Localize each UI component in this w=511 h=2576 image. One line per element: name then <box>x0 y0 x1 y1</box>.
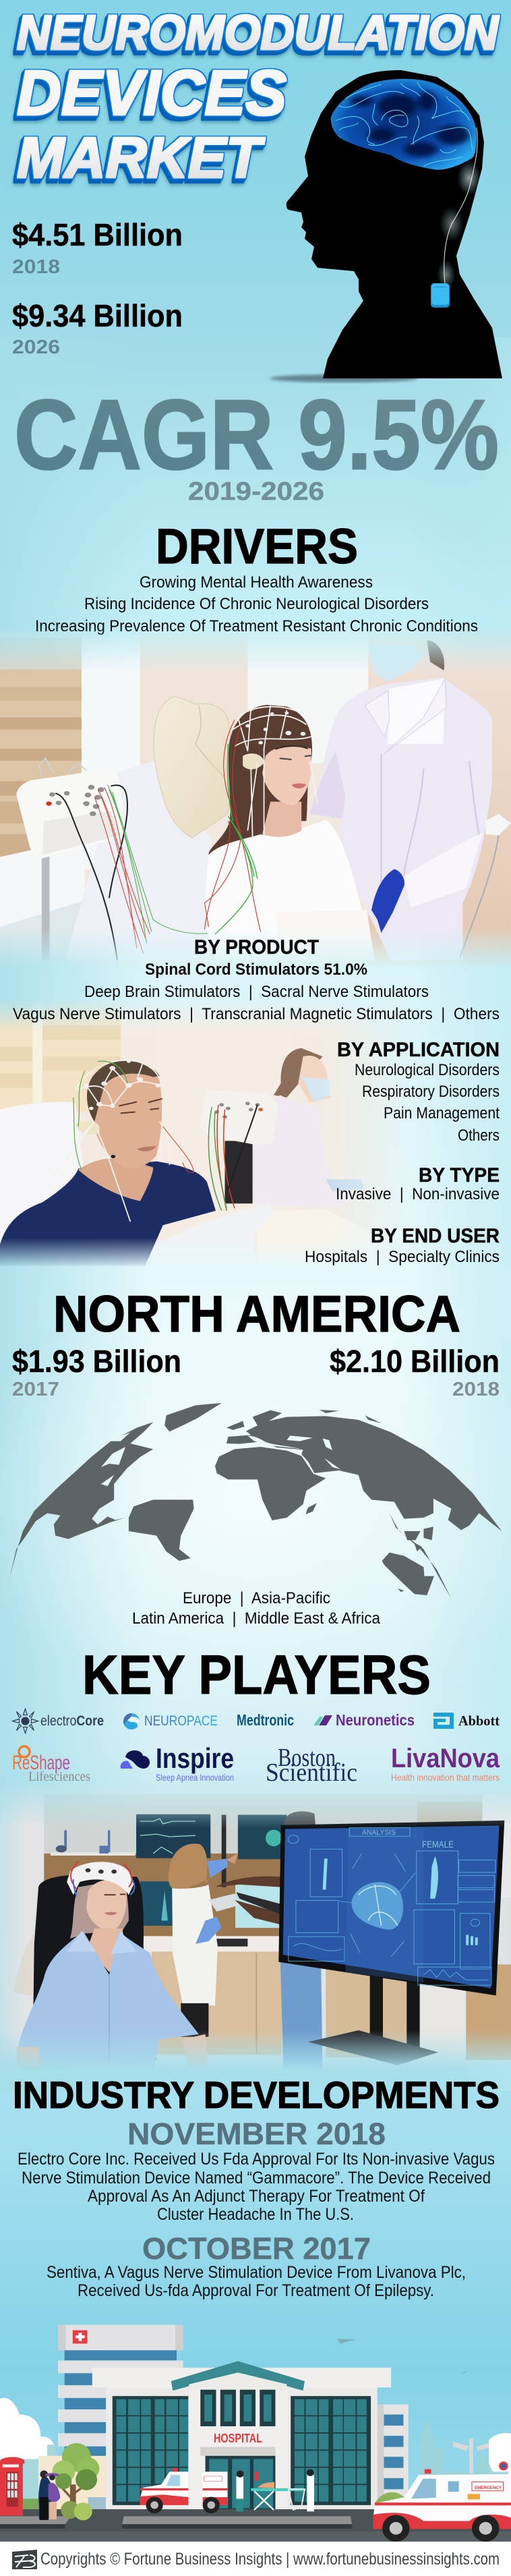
hospital sign: HOSPITAL <box>214 2432 262 2445</box>
drivers list <box>35 573 478 635</box>
logo: electroCore <box>12 1709 104 1734</box>
segment: by application: Others <box>458 1126 500 1145</box>
icon: Fortune Business Insights logo <box>12 2550 37 2569</box>
segment: by end user <box>305 1225 500 1266</box>
title line: neuromodulation: NEUROMODULATION <box>17 6 500 60</box>
other regions list: Latin America | Middle East & Africa <box>132 1609 381 1628</box>
logo: Inspire <box>121 1742 234 1783</box>
north america 2017 value: $1.93 Billion <box>12 1344 181 1379</box>
north america 2018 value: 2018 <box>452 1379 500 1400</box>
map: canada lakes and inlets <box>101 1432 130 1486</box>
segment: by product <box>13 936 500 1023</box>
phone box <box>0 2457 24 2515</box>
logo: Boston Scientific: Scientific <box>266 1758 357 1787</box>
lab cabinets <box>144 1936 511 2063</box>
icon: glowing brain <box>331 79 477 170</box>
heading: key players: KEY PLAYERS <box>82 1644 431 1706</box>
bush and street camera <box>375 2438 508 2504</box>
development: november 2018: Cluster Headache In The U.S. <box>157 2205 354 2224</box>
segment: by application: Pain Management <box>384 1104 500 1122</box>
tree and bushes <box>52 2443 99 2521</box>
monitoring device with leads <box>16 758 222 961</box>
segment: by type <box>336 1164 500 1203</box>
segment: by application <box>337 1039 500 1145</box>
ambulance label: EMERGENCY <box>475 2486 502 2490</box>
blue glove <box>371 869 404 933</box>
world map <box>10 1403 502 1599</box>
segment: by end user: Hospitals | Specialty Clinics <box>305 1248 500 1266</box>
map: madagascar <box>305 1503 317 1514</box>
tower block <box>38 2325 183 2510</box>
north america 2018 value: $2.10 Billion <box>330 1344 500 1379</box>
clouds and skyline <box>0 2339 511 2511</box>
illustration: hospital street scene <box>0 2325 511 2542</box>
logo: Inspire: Inspire <box>156 1742 234 1774</box>
ambulance in foreground <box>373 2469 511 2542</box>
development: october 2017 <box>47 2231 466 2300</box>
2018 market value: $4.51 Billion <box>12 217 183 252</box>
map: north america <box>10 1422 153 1577</box>
logo: NeuroPace: NEUROPACE <box>144 1713 218 1729</box>
nurse in lab coat <box>309 640 511 961</box>
map: australia <box>382 1553 434 1595</box>
development: november 2018 <box>18 2117 495 2224</box>
logo: Neuronetics: Neuronetics <box>336 1711 415 1729</box>
monitoring device with leads <box>200 1090 278 1211</box>
icon: stimulation wire <box>444 127 477 283</box>
shelf flasks <box>56 1830 110 1854</box>
north america 2017 value: 2017 <box>12 1379 59 1400</box>
road and pavements <box>0 2509 511 2542</box>
map: southeast asia islands <box>390 1513 462 1599</box>
background monitors <box>136 1814 287 1947</box>
drivers list: Rising Incidence Of Chronic Neurological Disorders <box>84 595 429 613</box>
icon: head silhouette with brain and implant <box>270 70 502 382</box>
reclining chair <box>65 761 212 961</box>
photo: neuro lab with seated woman and analysis screen <box>0 1784 511 2083</box>
heading: drivers: DRIVERS <box>156 519 358 574</box>
medical staff and stretcher <box>236 2469 314 2511</box>
other regions list <box>132 1589 381 1628</box>
patient chair <box>0 1102 85 1244</box>
logo: electroCore: electroCore <box>40 1713 104 1729</box>
map: inland seas <box>247 1435 340 1469</box>
segment: by product: Deep Brain Stimulators | Sacral Nerve Stimulators <box>84 983 429 1001</box>
development: november 2018: Approval As An Adjunct Therapy For Treatment Of <box>88 2187 425 2206</box>
map: europe islands <box>227 1410 382 1430</box>
drivers list: Growing Mental Health Awareness <box>140 573 373 592</box>
logo: ReShape Lifesciences: ReShape <box>12 1752 70 1774</box>
map: africa <box>215 1447 326 1520</box>
segment: by end user: BY END USER <box>371 1225 500 1247</box>
logo: Boston Scientific <box>266 1744 357 1787</box>
logo: ReShape Lifesciences <box>12 1746 90 1784</box>
logo: Medtronic: Medtronic <box>237 1711 294 1729</box>
2018 market value <box>12 217 183 278</box>
development: october 2017: OCTOBER 2017 <box>142 2231 371 2266</box>
title line: market: MARKET <box>17 126 265 190</box>
drivers list: Increasing Prevalence Of Treatment Resistant Chronic Conditions <box>35 617 478 635</box>
title <box>17 6 500 190</box>
2026 market value: $9.34 Billion <box>12 298 183 333</box>
technician <box>251 1048 365 1208</box>
wood wall <box>44 1854 282 1941</box>
photo: EEG patient seated with nurse <box>0 628 511 985</box>
pillow <box>154 697 231 838</box>
logo: Boston Scientific: Boston <box>278 1744 336 1772</box>
other regions list: Europe | Asia-Pacific <box>183 1589 330 1607</box>
segment: by type: Invasive | Non-invasive <box>336 1185 500 1203</box>
ambulance at entrance <box>140 2468 227 2513</box>
map: greenland <box>164 1403 222 1431</box>
development: november 2018: NOVEMBER 2018 <box>127 2117 386 2151</box>
researcher at monitors <box>169 1811 323 2078</box>
heading: north america: NORTH AMERICA <box>53 1286 460 1343</box>
window blinds <box>0 638 82 857</box>
north america 2017 value <box>12 1344 181 1400</box>
logo: ReShape Lifesciences: Lifesciences <box>28 1769 90 1784</box>
logo: NeuroPace <box>123 1713 218 1729</box>
2018 market value: 2018 <box>12 256 60 278</box>
segment: by application: BY APPLICATION <box>337 1039 500 1061</box>
segment: by type: BY TYPE <box>419 1164 500 1186</box>
logo: LivaNova: LivaNova <box>391 1744 500 1773</box>
2026 market value: 2026 <box>12 337 60 358</box>
right wing <box>378 2404 409 2509</box>
segment: by product: Spinal Cord Stimulators 51.0% <box>145 961 367 979</box>
screen label: analysis: ANALYSIS <box>362 1829 396 1837</box>
north america 2018 value <box>330 1344 500 1400</box>
CAGR figure: 2019-2026 <box>188 478 324 506</box>
2026 market value <box>12 298 183 358</box>
hospital main building <box>92 2361 391 2516</box>
development: october 2017: Received Us-fda Approval For Treatment Of Epilepsy. <box>78 2281 434 2300</box>
footer <box>0 2542 511 2576</box>
segment: by product: BY PRODUCT <box>194 936 319 958</box>
photo: male EEG patient with technician <box>0 1002 385 1266</box>
patient body and face <box>0 1060 216 1266</box>
desk and white screen <box>151 1203 274 1254</box>
screen label: female: FEMALE <box>422 1839 454 1850</box>
couple on the pavement <box>38 2471 60 2520</box>
logo: Abbott <box>433 1713 500 1729</box>
title line: devices: DEVICES <box>17 57 287 129</box>
icon: implanted stimulator <box>431 283 450 308</box>
logo: Inspire: Sleep Apnea Innovation <box>156 1772 234 1783</box>
large analysis screen <box>278 1821 504 2065</box>
development: october 2017: Sentiva, A Vagus Nerve Stimulation Device From Livanova Plc, <box>47 2263 466 2282</box>
map: south america <box>129 1499 194 1561</box>
logo: Abbott: Abbott <box>458 1713 500 1729</box>
patient with EEG cap <box>204 705 375 961</box>
map: eurasia <box>227 1410 502 1531</box>
seated woman with EEG headset <box>13 1861 208 2073</box>
